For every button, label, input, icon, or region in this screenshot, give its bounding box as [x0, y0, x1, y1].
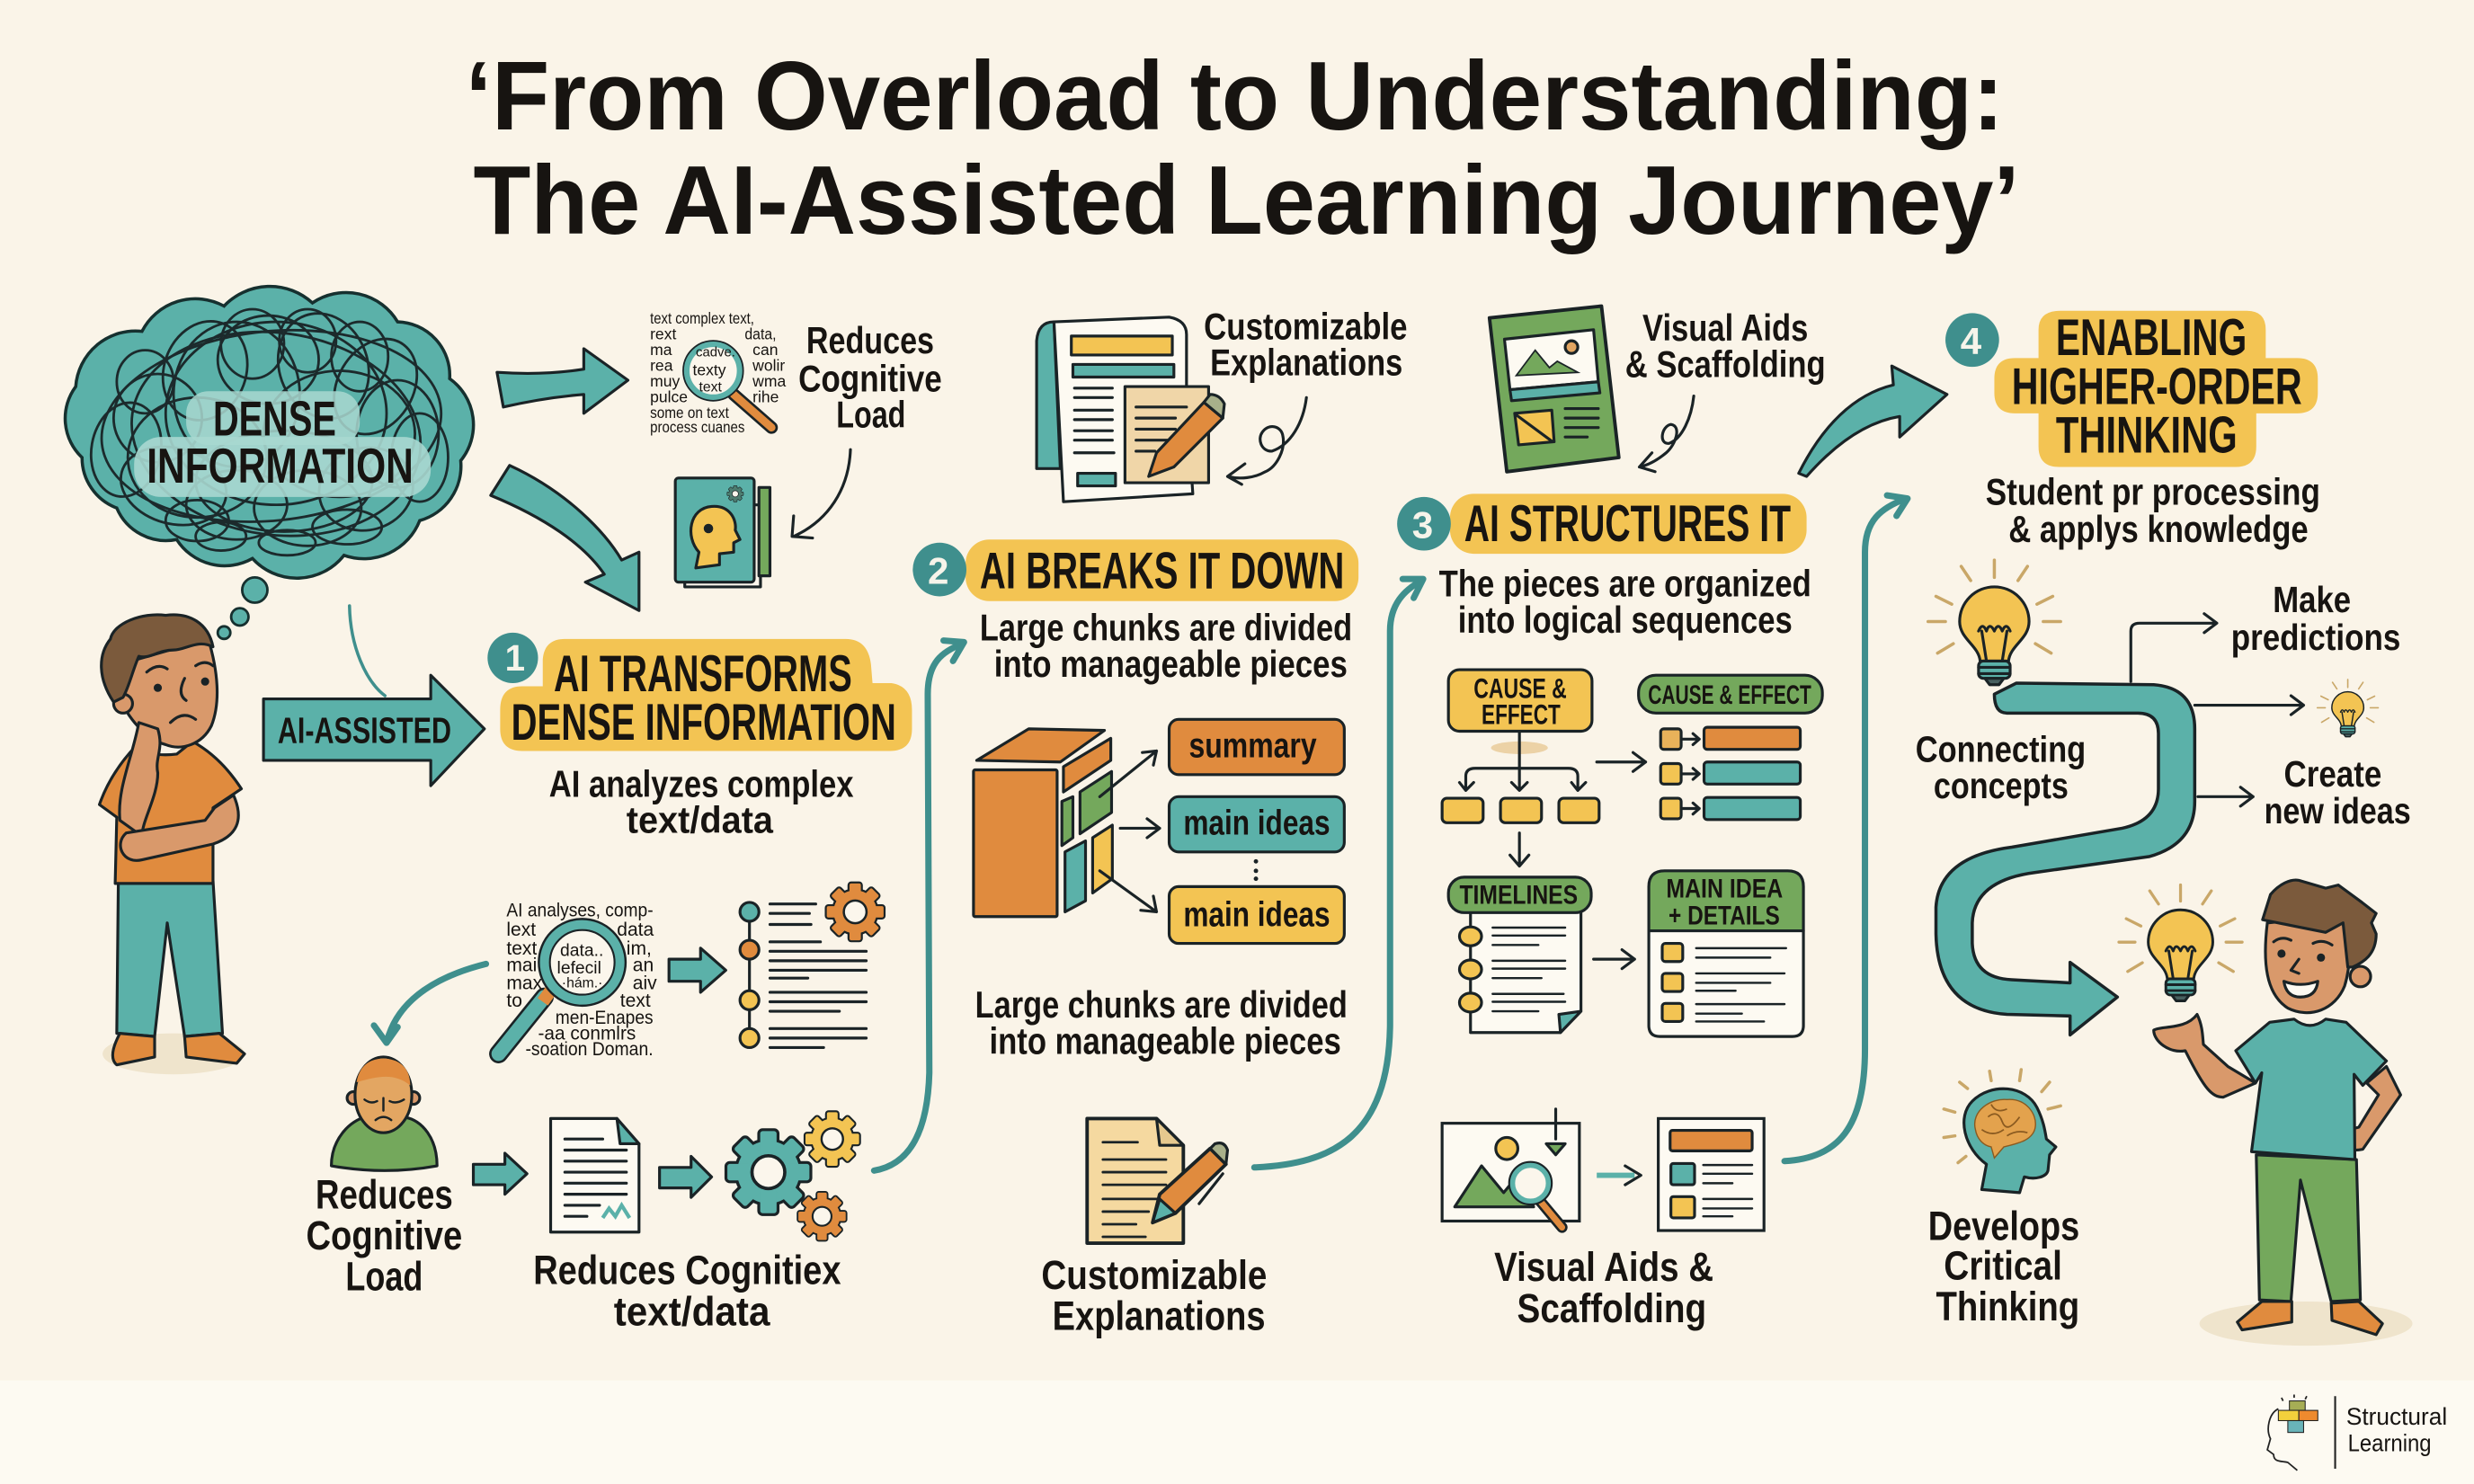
box: summary: summary	[1188, 726, 1317, 765]
badge 2: 2	[928, 549, 948, 591]
icon: magnified analysis text: text	[620, 991, 651, 1011]
label: reduces cognitive load top: Reduces	[806, 319, 934, 361]
diagram: main idea and details	[1649, 871, 1803, 1036]
icon: magnified text top	[650, 309, 786, 436]
label: reduces cognitive load lower: Cognitive	[306, 1213, 462, 1258]
label: visual aids top: Visual Aids	[1642, 307, 1808, 349]
label: create new ideas: new ideas	[2265, 790, 2411, 831]
step 3 description: into logical sequences	[1458, 599, 1793, 641]
icon: magnified analysis text: AI analyses, comp-	[506, 901, 654, 921]
icon: magnified analysis text: text	[506, 938, 537, 959]
icon: magnified text top: text complex text,	[650, 309, 754, 327]
step 4 heading: THINKING	[2056, 407, 2238, 465]
icon: document	[551, 1118, 639, 1232]
connector arrow to step 4	[1784, 495, 1908, 1161]
label pills	[134, 391, 431, 497]
label: reduces cognitiex: text/data	[614, 1288, 770, 1334]
label: customizable explanations lower: Customizable	[1041, 1252, 1267, 1298]
step 2 heading: AI BREAKS IT DOWN	[980, 543, 1344, 600]
diagram: cause and effect tree: CAUSE &	[1473, 672, 1567, 705]
label: visual aids top: & Scaffolding	[1625, 342, 1826, 385]
icon: magnified text top: rext	[650, 324, 676, 342]
step 2 description: into manageable pieces	[994, 643, 1348, 685]
footer band	[0, 1381, 2474, 1484]
label: create new ideas	[2265, 753, 2411, 831]
arrow: cloud to step 1	[491, 466, 639, 610]
box: main ideas teal	[1170, 796, 1344, 852]
thought bubbles	[218, 577, 267, 639]
label: customizable explanations lower	[1041, 1252, 1267, 1339]
icon: customizable document top	[1037, 317, 1224, 502]
title: ‘From Overload to Understanding:	[466, 41, 2004, 151]
thin connector from cloud	[350, 606, 385, 696]
overwhelmed student	[100, 615, 245, 1074]
diagram: cause and effect tree: EFFECT	[1482, 698, 1561, 731]
icon: magnified text top: wolir	[752, 356, 785, 374]
box: summary	[1170, 719, 1344, 775]
arrow: reduces to book	[792, 449, 850, 538]
icon: magnified analysis text: men-Enapes	[556, 1008, 654, 1028]
diagram: cause and effect tree	[1442, 670, 1599, 866]
icon: magnified analysis text	[499, 901, 657, 1060]
logo: Learning	[2348, 1429, 2432, 1457]
label: visual aids lower	[1494, 1244, 1713, 1331]
diagram: main idea and details: MAIN IDEA	[1666, 875, 1783, 904]
step 1 heading: AI TRANSFORMS	[554, 645, 852, 703]
step 1 description	[549, 762, 854, 841]
label: customizable explanations lower: Explanations	[1053, 1293, 1266, 1339]
label: customizable explanations top	[1204, 305, 1408, 384]
step 4 description: Student pr processing	[1986, 471, 2320, 513]
diagram: timelines: TIMELINES	[1459, 881, 1578, 911]
diagram: cause and effect rows: CAUSE & EFFECT	[1648, 680, 1811, 710]
icon: visual aids card	[1490, 307, 1619, 472]
label: create new ideas: Create	[2284, 753, 2381, 795]
icon: split block	[974, 729, 1112, 917]
arrow: analysis to timeline	[669, 948, 725, 992]
icon: magnified text top: wma	[752, 372, 786, 390]
icon: magnified analysis text: aiv	[633, 973, 657, 993]
arrows from block	[1099, 751, 1160, 911]
icon: magnified analysis text: data..	[560, 942, 603, 961]
label pills: DENSE	[213, 391, 336, 446]
badge 4: 4	[1961, 320, 1982, 362]
icon: magnified analysis text: to	[506, 991, 522, 1011]
box: main ideas yellow	[1170, 886, 1344, 944]
squiggle arrow top 3	[1640, 396, 1694, 472]
dense information cloud	[66, 287, 474, 578]
badge 3	[1397, 497, 1451, 551]
step 4 heading: HIGHER-ORDER	[2012, 358, 2302, 415]
icon: magnified text top: can	[752, 341, 778, 359]
AI-assisted arrow: AI-ASSISTED	[278, 710, 451, 751]
arrow small 2	[660, 1157, 712, 1197]
label: customizable explanations top: Customizable	[1204, 305, 1408, 347]
icon: document with pen	[1087, 1118, 1227, 1243]
label: reduces cognitive load top: Load	[836, 394, 905, 436]
badge 3: 3	[1412, 504, 1433, 547]
icon: scaffolded layout	[1659, 1118, 1764, 1231]
label pills: INFORMATION	[147, 439, 414, 493]
label: reduces cognitive load lower: Load	[345, 1254, 423, 1300]
arrow: cloud to reduces	[497, 349, 628, 413]
label: visual aids lower: Scaffolding	[1517, 1285, 1706, 1331]
AI-assisted arrow	[263, 675, 485, 786]
step 3 description: The pieces are organized	[1439, 562, 1811, 604]
label: develops critical thinking: Thinking	[1936, 1284, 2079, 1329]
label: reduces cognitive load top: Cognitive	[798, 357, 942, 399]
icon: magnified analysis text: lefecil	[557, 959, 601, 978]
step 1 description: AI analyzes complex	[549, 762, 854, 804]
box: main ideas teal: main ideas	[1183, 804, 1330, 842]
icon: magnified analysis text: -aa conmlrs	[538, 1024, 636, 1044]
big arrow to step 4	[1799, 366, 1947, 476]
label: customizable explanations top: Explanations	[1210, 342, 1402, 384]
title	[466, 41, 2020, 255]
label: develops critical thinking	[1928, 1204, 2079, 1329]
step 4 description: & applys knowledge	[2008, 508, 2309, 550]
vertical dots	[1254, 859, 1259, 881]
diagram: cause and effect rows	[1639, 675, 1822, 820]
icon: magnified text top: some on text	[650, 404, 729, 422]
icon: magnified analysis text: lext	[506, 920, 536, 940]
step 4 heading: ENABLING	[2056, 309, 2247, 367]
icon: magnified text top: muy	[650, 372, 680, 390]
icon: magnified text top: cadve.	[696, 346, 735, 360]
icon: tired student	[332, 1057, 437, 1170]
logo: Structural	[2346, 1402, 2447, 1430]
icon: timeline list	[740, 884, 884, 1047]
icon: magnified text top: ma	[650, 341, 672, 359]
step 2 description: Large chunks are divided	[980, 607, 1352, 649]
step 1 description: text/data	[627, 799, 774, 841]
icon: magnified analysis text: -soation Doman.	[525, 1039, 654, 1060]
title: The AI-Assisted Learning Journey’	[474, 146, 2020, 255]
step 1 heading: DENSE INFORMATION	[512, 694, 896, 751]
label: visual aids lower: Visual Aids &	[1494, 1244, 1713, 1290]
label: make predictions: predictions	[2231, 617, 2400, 658]
branch arrows	[2131, 614, 2303, 806]
icon: magnified analysis text: max	[506, 973, 543, 993]
arrow: analysis to student	[374, 964, 486, 1043]
repeated description: into manageable pieces	[989, 1019, 1341, 1062]
connector arrow to step 3	[1254, 579, 1423, 1168]
label: connecting concepts: concepts	[1934, 765, 2069, 806]
arrow timelines to details	[1594, 950, 1634, 969]
step 3 description	[1439, 562, 1811, 641]
icon: magnified analysis text: im,	[627, 938, 652, 959]
icon: gears	[727, 1112, 859, 1240]
arrow image to layout	[1597, 1174, 1634, 1177]
step 3 heading: AI STRUCTURES IT	[1464, 495, 1791, 553]
icon: head with brain	[1944, 1070, 2060, 1193]
icon: magnified analysis text: data	[617, 920, 654, 940]
icon: bulb connecting concepts	[1928, 560, 2060, 685]
label: visual aids top	[1625, 307, 1826, 385]
step 4 description	[1986, 471, 2320, 550]
squiggle arrow top 2	[1227, 397, 1306, 484]
label: develops critical thinking: Develops	[1928, 1204, 2079, 1249]
label: make predictions: Make	[2273, 579, 2351, 620]
label: reduces cognitive load lower: Reduces	[316, 1171, 453, 1217]
badge 2	[912, 543, 966, 596]
label: connecting concepts	[1916, 729, 2086, 806]
icon: magnified analysis text: an	[633, 955, 654, 975]
icon: magnified analysis text: mai	[506, 955, 537, 975]
serpentine arrow	[1936, 683, 2194, 1035]
logo mark	[2267, 1395, 2318, 1471]
arrow small 1	[474, 1153, 527, 1195]
arrow tree to rows	[1597, 752, 1646, 771]
diagram: main idea and details: + DETAILS	[1669, 902, 1780, 931]
connector arrow to step 2	[874, 641, 964, 1170]
badge 4	[1945, 313, 1999, 367]
repeated description: Large chunks are divided	[975, 983, 1348, 1026]
icon: magnified text top: rea	[650, 356, 673, 374]
icon: book with head	[675, 478, 770, 587]
label: reduces cognitive load lower	[306, 1171, 462, 1300]
step 1 heading	[487, 633, 912, 751]
step 4 heading	[1994, 309, 2318, 467]
icon: magnified text top: process cuanes	[650, 418, 745, 436]
repeated description	[975, 983, 1348, 1062]
label: reduces cognitive load top	[798, 319, 942, 436]
label: reduces cognitiex	[533, 1248, 841, 1334]
label: make predictions	[2231, 579, 2400, 658]
box: main ideas yellow: main ideas	[1183, 895, 1330, 934]
logo	[2267, 1395, 2447, 1471]
label: connecting concepts: Connecting	[1916, 729, 2086, 770]
icon: magnified text top: data,	[744, 324, 777, 342]
icon: magnified text top: pulce	[650, 388, 688, 406]
diagram: timelines	[1448, 877, 1591, 1033]
step 3 heading	[1397, 493, 1807, 554]
badge 1	[487, 633, 538, 683]
label: develops critical thinking: Critical	[1944, 1242, 2062, 1288]
happy student	[2154, 880, 2413, 1346]
icon: small bulb	[2318, 680, 2379, 737]
icon: bulb above hand	[2119, 885, 2242, 1000]
badge 1: 1	[505, 637, 525, 679]
icon: image with magnifier	[1442, 1109, 1580, 1227]
step 2 description	[980, 607, 1352, 685]
icon: magnified text top: rihe	[752, 388, 779, 406]
label: reduces cognitiex: Reduces Cognitiex	[533, 1248, 841, 1293]
icon: magnified analysis text: ·hám.·	[562, 976, 602, 991]
icon: magnified text top: text	[699, 379, 723, 395]
step 2 heading	[912, 539, 1358, 601]
icon: magnified text top: texty	[692, 361, 726, 379]
